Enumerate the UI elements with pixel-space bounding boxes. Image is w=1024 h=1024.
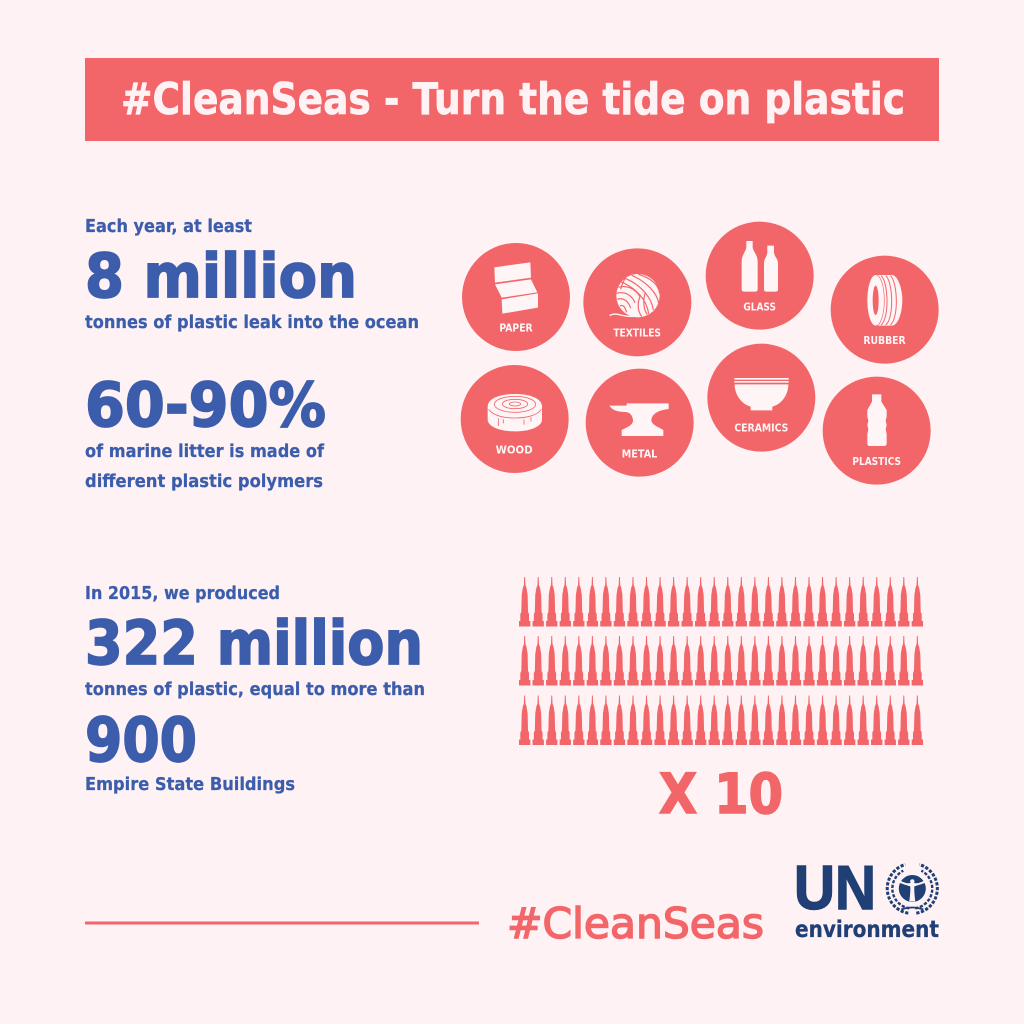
text block: 322 million tonnes [85,583,425,700]
icon: plastics bottle: PLASTICS [852,455,901,468]
footer rule [85,922,479,924]
icon: rubber tyre: RUBBER [863,334,906,347]
logo: UN environment [794,854,939,943]
text block: 8 million tonnes: 8 million [85,242,357,312]
icon: UN emblem [887,864,937,913]
text block: 8 million tonnes [85,216,419,333]
panel: material circles, right columns [706,222,939,485]
text block: 322 million tonnes: In 2015, we produced [85,583,280,604]
footer hashtag: #CleanSeas [507,899,764,948]
icon: glass bottles: GLASS [743,300,776,313]
icon: paper: PAPER [499,322,533,335]
logo: UN environment: UN [794,854,876,923]
icon: ceramics bowl: CERAMICS [734,422,788,435]
text block: 8 million tonnes: Each year, at least [85,216,252,237]
text block: 900 Empire State Buildings: Empire State Buildings [85,774,295,795]
text block: 8 million tonnes: tonnes of plastic leak into the ocean [85,312,419,333]
panel: material circles, left columns [461,243,694,477]
title banner: #CleanSeas - Turn the tide on plastic [121,74,905,125]
text block: 60-90% marine litter [85,371,326,492]
icon: textiles [583,248,691,356]
text block: 322 million tonnes: 322 million [85,609,423,679]
icon: wood [461,365,569,473]
icon: paper [462,243,570,351]
text block: 322 million tonnes: tonnes of plastic, equal to more than [85,679,425,700]
icon: metal anvil: METAL [622,448,657,461]
text block: 900 Empire State Buildings: 900 [85,706,197,776]
icon: glass bottles [706,222,814,330]
text block: 60-90% marine litter: 60-90% [85,371,326,441]
icon: rubber tyre [831,256,939,364]
chart: rows of Empire State Buildings [519,577,923,745]
icon: plastics bottle [823,377,931,485]
logo: UN environment: environment [795,917,939,943]
icon: metal anvil [586,369,694,477]
title banner [85,58,939,141]
multiplier label: X 10 [659,762,783,826]
icon: ceramics bowl [707,344,815,452]
icon: textiles: TEXTILES [613,327,661,340]
text block: 60-90% marine litter: of marine litter is made of [85,441,324,462]
icon: wood: WOOD [496,444,533,457]
text block: 900 Empire State Buildings [85,706,295,795]
text block: 60-90% marine litter: different plastic polymers [85,471,323,492]
